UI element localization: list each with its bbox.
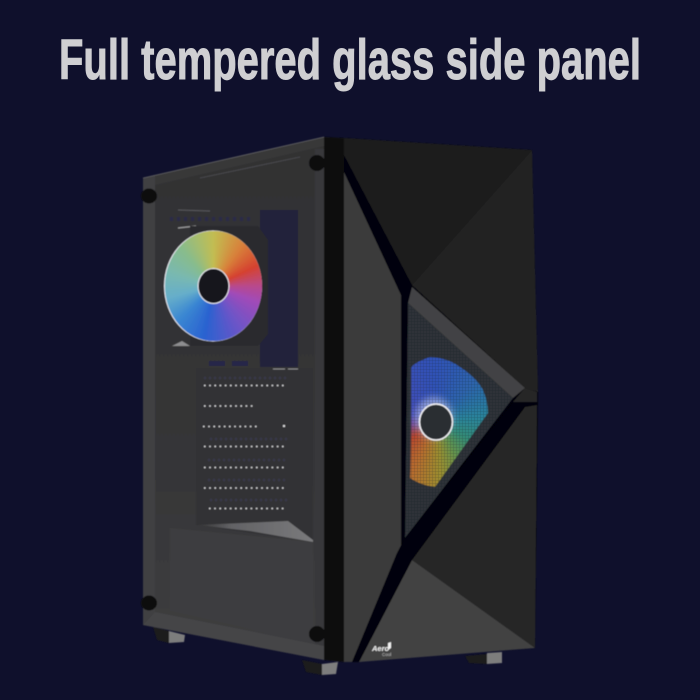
panel: tempered glass side (141, 137, 325, 660)
feet (153, 627, 502, 675)
logo: AeroCool: Aero (371, 644, 390, 653)
top perforations (170, 217, 254, 221)
fan bracket (190, 226, 268, 346)
front fan glow through mesh (404, 303, 504, 538)
left light facet (344, 172, 401, 662)
panel: black front edge (324, 137, 344, 662)
mesh background (405, 303, 513, 538)
rainbow fan (164, 230, 262, 342)
rear slots (203, 386, 287, 508)
upper right facet (412, 150, 538, 392)
black lower diagonal (352, 402, 537, 662)
lower light facet (359, 560, 535, 662)
dark corner (513, 388, 537, 402)
glass frame edges (143, 175, 155, 625)
lower right facet (412, 405, 537, 648)
lit floor (196, 521, 313, 542)
blue cutout behind the tray (260, 210, 298, 367)
panel: front fascia (344, 138, 538, 662)
computer case (141, 137, 538, 675)
upper dark facet (344, 138, 532, 285)
motherboard tray dark area (196, 368, 313, 542)
light band above mesh (408, 287, 525, 398)
icon: screws (141, 155, 325, 642)
logo: AeroCool (371, 642, 391, 657)
front diagonal accents (352, 287, 537, 662)
logo: AeroCool: Cool (382, 652, 391, 657)
PSU shroud (170, 528, 313, 643)
fascia backing (344, 138, 538, 662)
